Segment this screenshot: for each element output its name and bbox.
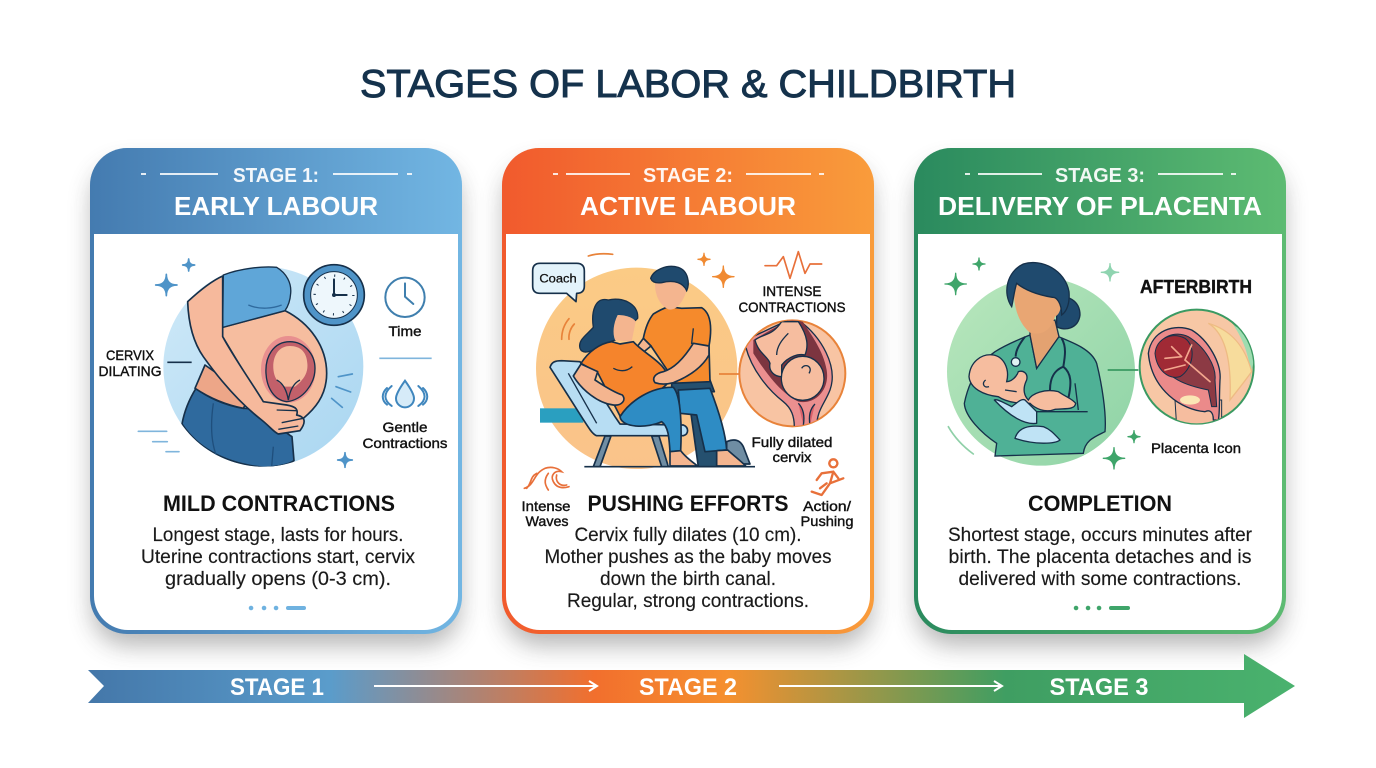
- label: intense: INTENSE: [762, 283, 822, 299]
- description: active labour: Regular, strong contractions.: [567, 591, 809, 612]
- newborn: [969, 355, 1076, 411]
- label: intense waves: Intense: [522, 498, 571, 514]
- subheading: pushing efforts: PUSHING EFFORTS: [588, 491, 788, 516]
- icon: gentle contraction droplet: [383, 381, 427, 407]
- gloves: [994, 400, 1060, 443]
- icon: time: [385, 278, 425, 317]
- label: time: Time: [388, 323, 422, 339]
- description: early labour: Uterine contractions start, cervix: [141, 547, 416, 568]
- near leg: [620, 387, 681, 452]
- illustration: nurse holding newborn: [945, 258, 1258, 469]
- description: active labour: Cervix fully dilates (10 cm).: [574, 525, 802, 546]
- illustration: pregnant belly with dilating cervix: [138, 259, 432, 467]
- stage 3 heading: DELIVERY OF PLACENTA: [938, 191, 1262, 221]
- man: [637, 266, 750, 467]
- label: fully dilated: Fully dilated: [752, 434, 832, 450]
- panel: stage 3 delivery of placenta: [914, 148, 1286, 646]
- stage 1 label: STAGE 1:: [233, 165, 319, 187]
- label: pushing: Pushing: [800, 513, 854, 529]
- label: cervix: cervix: [772, 449, 812, 465]
- label: gentle: Gentle: [382, 419, 428, 435]
- illustration: coach supporting labouring mother: [524, 252, 845, 495]
- timeline arrow: [88, 654, 1295, 718]
- connector arrow 2: [779, 681, 1002, 691]
- man's arm: [654, 343, 709, 384]
- stage 2 heading: ACTIVE LABOUR: [580, 191, 796, 221]
- description: active labour: Mother pushes as the baby moves: [544, 547, 832, 568]
- chair: [550, 361, 688, 467]
- label: dilating: DILATING: [98, 363, 162, 379]
- speech bubble: coach: Coach: [539, 272, 577, 286]
- description: active labour: down the birth canal.: [600, 569, 776, 590]
- panel: stage 2 active labour: [502, 148, 874, 646]
- label: placenta icon: Placenta Icon: [1151, 440, 1241, 456]
- icon: action / pushing runner: [812, 459, 843, 495]
- stage 1 heading: EARLY LABOUR: [174, 191, 378, 221]
- description: delivery of placenta: delivered with some contractions.: [958, 569, 1242, 590]
- speech bubble: coach: [533, 263, 584, 302]
- inset: fully dilated cervix: [739, 320, 845, 427]
- timeline label: stage 1: STAGE 1: [230, 674, 324, 701]
- nurse: [964, 263, 1105, 456]
- label: afterbirth: AFTERBIRTH: [1140, 277, 1252, 297]
- stage 2 label: STAGE 2:: [643, 165, 733, 187]
- description: active labour: [544, 525, 832, 612]
- connector arrow 1: [374, 681, 597, 691]
- icon: wall clock: [304, 265, 364, 325]
- subheading: mild contractions: MILD CONTRACTIONS: [163, 491, 395, 516]
- woman: [573, 299, 746, 466]
- far leg: [678, 388, 727, 452]
- label: cervix dilating: CERVIX: [106, 347, 155, 363]
- timeline label: stage 3: STAGE 3: [1050, 674, 1148, 701]
- label: action: Action/: [803, 498, 851, 514]
- description: early labour: Longest stage, lasts for hours.: [152, 525, 404, 546]
- description: delivery of placenta: Shortest stage, occurs minutes after: [948, 525, 1253, 546]
- label: waves: Waves: [526, 513, 568, 529]
- stage 3 label: STAGE 3:: [1055, 165, 1145, 187]
- description: early labour: gradually opens (0-3 cm).: [165, 569, 391, 590]
- timeline label: stage 2: STAGE 2: [639, 674, 737, 701]
- icon: waves: [524, 467, 569, 490]
- panel: stage 1 early labour: [90, 148, 462, 646]
- title: STAGES OF LABOR & CHILDBIRTH: [360, 63, 1016, 106]
- description: early labour: [141, 525, 416, 590]
- label: contractions: Contractions: [362, 435, 448, 451]
- subheading: completion: COMPLETION: [1028, 491, 1172, 516]
- label: contractions: CONTRACTIONS: [738, 299, 846, 315]
- description: delivery of placenta: birth. The placenta detaches and is: [948, 547, 1252, 568]
- description: delivery of placenta: [948, 525, 1253, 590]
- inset: placenta: [1140, 310, 1258, 427]
